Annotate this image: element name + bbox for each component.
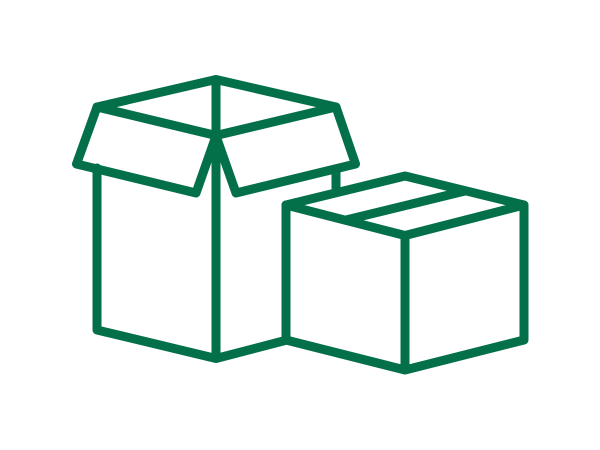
box top xyxy=(286,176,524,236)
left flap xyxy=(76,107,216,193)
icon: closed taped box xyxy=(286,176,524,370)
packing tape xyxy=(346,191,465,220)
right flap xyxy=(216,107,356,193)
box body xyxy=(286,205,524,370)
icon: open tall box xyxy=(76,80,356,358)
open top rim xyxy=(97,80,336,136)
box walls xyxy=(97,136,336,358)
